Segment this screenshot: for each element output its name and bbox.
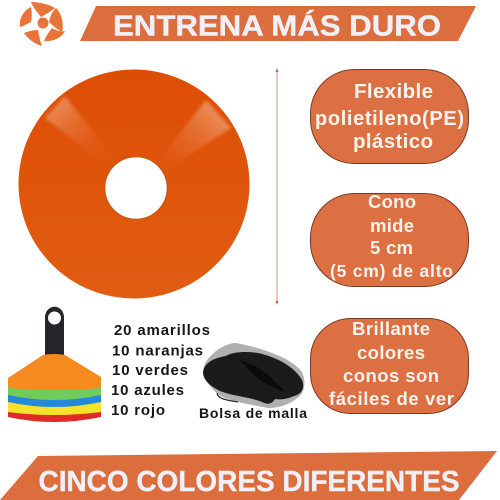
blue cone [8,390,101,407]
pill: size: mide [370,215,414,236]
colour list: 10 naranjas [112,342,203,360]
pill: bright colours: colores [357,342,425,363]
pill: size: Cono [368,191,416,212]
footer banner [0,451,497,500]
holder [45,307,64,357]
colour list: 10 verdes [112,362,188,379]
cone stack with holder [8,307,101,422]
footer heading: CINCO COLORES DIFERENTES [38,466,460,498]
orange dome [8,354,101,390]
height arrow [276,68,278,305]
pill: material [310,70,468,164]
bag label: Bolsa de malla [199,405,307,421]
pill: size: (5 cm) de alto [330,261,453,281]
pill: bright colours: fáciles de ver [329,388,454,409]
pill: size [310,191,468,286]
orange flat cone disc [18,70,250,298]
colour list [111,322,210,419]
pill: material: plástico [353,130,433,153]
pill: bright colours: conos son [343,365,439,386]
header banner [80,6,476,42]
title: ENTRENA MÁS DURO [113,8,441,42]
colour list: 20 amarillos [114,322,210,339]
pill: size: 5 cm [370,237,413,258]
colour list: 10 azules [111,382,184,399]
pill: material: polietileno(PE) [315,108,464,130]
green cone [8,384,101,400]
red cone [8,405,101,422]
mesh bag [203,343,304,408]
pill: material: Flexible [354,80,433,103]
icon: star logo [20,2,65,46]
pill: bright colours: Brillante [352,318,430,339]
pill: bright colours [310,318,468,414]
colour list: 10 rojo [111,402,165,419]
yellow cone [8,398,101,415]
